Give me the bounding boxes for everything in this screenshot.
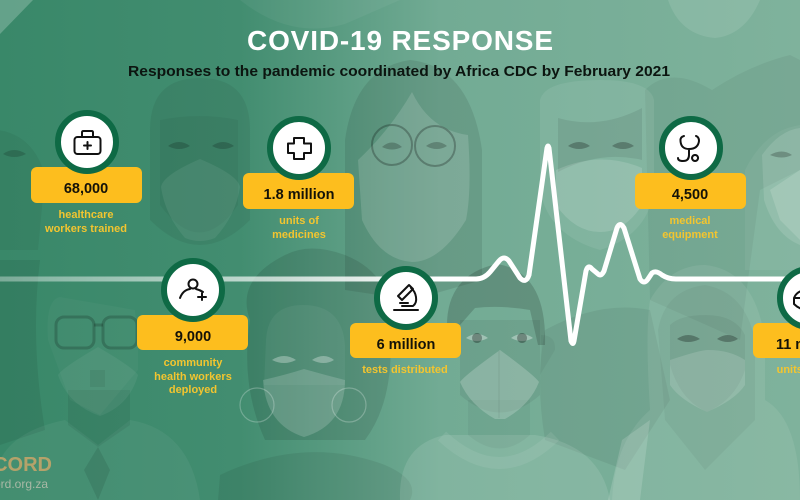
afro hair: [247, 248, 391, 440]
face: [762, 128, 800, 245]
icon: microscope: [394, 285, 418, 310]
value: 9,000: [175, 329, 211, 345]
collar: [442, 436, 555, 463]
value box: [137, 315, 248, 350]
eyes: [466, 334, 533, 341]
top-left corner shape: [0, 0, 33, 34]
label: health workers: [154, 371, 232, 383]
mask valve: [90, 370, 105, 387]
value: 4,500: [672, 187, 708, 203]
mask: [770, 170, 800, 240]
subtitle: Responses to the pandemic coordinated by Africa CDC by February 2021: [128, 63, 670, 80]
person: boy in mask: [400, 264, 610, 500]
icon ring: [270, 119, 328, 177]
face: [358, 92, 470, 262]
body: [400, 435, 610, 500]
person: man with glasses lower left: [0, 297, 200, 500]
heartbeat line: [0, 146, 800, 344]
person: right edge woman: [745, 125, 800, 270]
icon: first aid kit: [74, 131, 100, 154]
mask crease: [498, 351, 500, 418]
pupils: [472, 333, 527, 343]
person: woman with afro: [218, 248, 412, 500]
hair: [345, 60, 482, 300]
value: 1.8 million: [264, 187, 334, 203]
icon ring: [780, 269, 800, 327]
earrings: [240, 388, 366, 422]
glasses: [372, 125, 455, 166]
label: deployed: [169, 384, 217, 396]
value box: [635, 173, 746, 209]
value box: [243, 173, 354, 209]
label: medicines: [272, 229, 326, 241]
ear: [540, 335, 555, 375]
icon ring: [662, 119, 720, 177]
hair: [150, 78, 250, 245]
mask: [58, 347, 138, 416]
mask: [670, 350, 745, 412]
mask: [460, 350, 539, 419]
title: COVID-19 RESPONSE: [247, 25, 553, 56]
icon: stethoscope: [678, 136, 699, 161]
hair: [447, 264, 545, 345]
dark central shapes: [540, 308, 670, 470]
person: woman in hijab: [608, 265, 800, 500]
eyes: [272, 356, 334, 363]
eye: [770, 152, 792, 158]
label: healthcare: [58, 209, 114, 221]
icon ring: [164, 261, 222, 319]
eyes: [168, 142, 234, 149]
stat: healthcare workers trained: [31, 113, 142, 235]
tie: [84, 447, 110, 500]
person: woman with glasses: [345, 60, 482, 300]
body: [218, 452, 412, 500]
label: community: [164, 357, 223, 369]
face: [264, 305, 345, 385]
icon ring: [377, 269, 435, 327]
stat: units of PPE (cut off at right edge): [753, 269, 800, 376]
brows and eyes: [677, 335, 738, 342]
mask: [263, 369, 345, 437]
lighter cloak edge: [608, 420, 650, 500]
value: 6 million: [377, 337, 435, 353]
label: equipment: [662, 229, 718, 241]
label: medical: [670, 215, 710, 227]
person: far-left woman: [0, 130, 45, 250]
glasses: [56, 317, 137, 348]
forehead shade: [558, 108, 642, 172]
neck: [68, 390, 130, 447]
icon: medical cross: [288, 138, 311, 159]
person: masked man upper left: [150, 78, 250, 245]
stat: medical equipment: [635, 119, 746, 241]
hair: [745, 125, 800, 270]
head: [540, 80, 654, 250]
label: units of: [279, 215, 319, 227]
value box: [31, 167, 142, 203]
neck: [468, 400, 530, 448]
icon: person with plus: [180, 280, 206, 300]
eyes: [382, 142, 447, 150]
value box: [350, 323, 461, 358]
person: masked man upper right: [540, 80, 654, 250]
face: [670, 315, 745, 412]
face: [460, 320, 540, 412]
logo: [0, 454, 52, 491]
mask: [556, 159, 642, 232]
body: [0, 420, 200, 500]
stat: tests distributed: [350, 269, 461, 376]
value box: [753, 323, 800, 358]
label: tests distributed: [362, 364, 448, 376]
head: [48, 297, 138, 415]
eyes: [3, 150, 26, 157]
mask: [161, 159, 240, 241]
top heads: [240, 0, 400, 29]
face: [0, 130, 45, 250]
stat: community health workers deployed: [137, 261, 248, 396]
face: [160, 116, 238, 232]
icon: face mask: [794, 290, 800, 310]
label: workers trained: [44, 223, 127, 235]
hijab and body: [612, 265, 800, 500]
icon ring: [58, 113, 116, 171]
inner hood: [658, 285, 755, 470]
eyes: [568, 142, 634, 149]
stat: units of medicines: [243, 119, 354, 241]
value: 68,000: [64, 181, 108, 197]
